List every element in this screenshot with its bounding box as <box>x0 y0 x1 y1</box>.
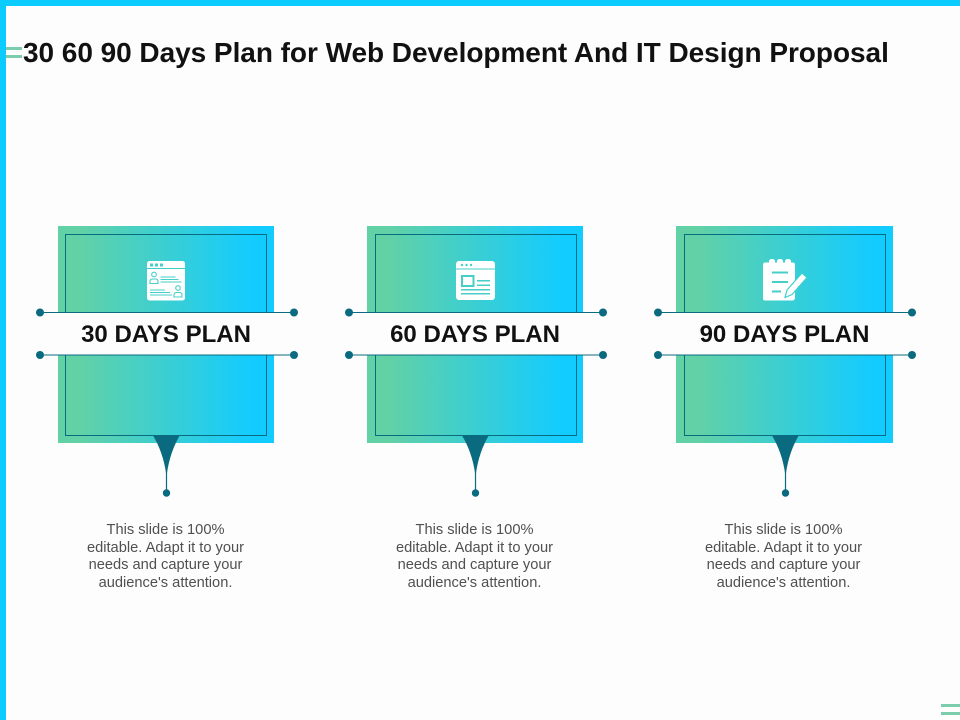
corner marker <box>941 704 960 715</box>
icon: browser article <box>456 261 495 300</box>
card background <box>367 226 583 443</box>
icon: browser with users <box>147 261 185 300</box>
left accent bar <box>0 0 6 720</box>
icon: notepad and pencil <box>763 259 807 300</box>
title band <box>340 308 611 359</box>
card background <box>676 226 893 443</box>
title band: 60 DAYS PLAN <box>390 321 560 348</box>
pin <box>462 435 489 497</box>
description text: audience's attention. <box>717 575 850 591</box>
panel: 30 days plan <box>31 226 302 591</box>
pin <box>153 435 180 497</box>
title: 30 60 90 Days Plan for Web Development And IT Design Proposal <box>23 37 889 68</box>
card inner border <box>66 234 266 436</box>
panel: 60 days plan <box>340 226 611 591</box>
description text: editable. Adapt it to your <box>87 540 244 556</box>
title band: 30 DAYS PLAN <box>81 321 251 348</box>
description text: needs and capture your <box>398 557 552 573</box>
description text: editable. Adapt it to your <box>705 540 862 556</box>
title band: 90 DAYS PLAN <box>700 321 869 348</box>
description text: needs and capture your <box>89 557 243 573</box>
card inner border <box>684 234 886 436</box>
title band <box>31 308 302 359</box>
card background <box>58 226 274 443</box>
panel: 90 days plan <box>649 226 920 591</box>
description text: This slide is 100% <box>106 522 224 538</box>
description text: audience's attention. <box>408 575 541 591</box>
title band <box>649 308 920 359</box>
description text: audience's attention. <box>99 575 232 591</box>
description text: This slide is 100% <box>416 522 534 538</box>
description text: editable. Adapt it to your <box>396 540 553 556</box>
pin <box>772 435 799 497</box>
card inner border <box>376 234 576 436</box>
top accent bar <box>0 0 960 6</box>
description text: This slide is 100% <box>724 522 842 538</box>
title marker <box>6 47 22 58</box>
description text: needs and capture your <box>707 557 861 573</box>
